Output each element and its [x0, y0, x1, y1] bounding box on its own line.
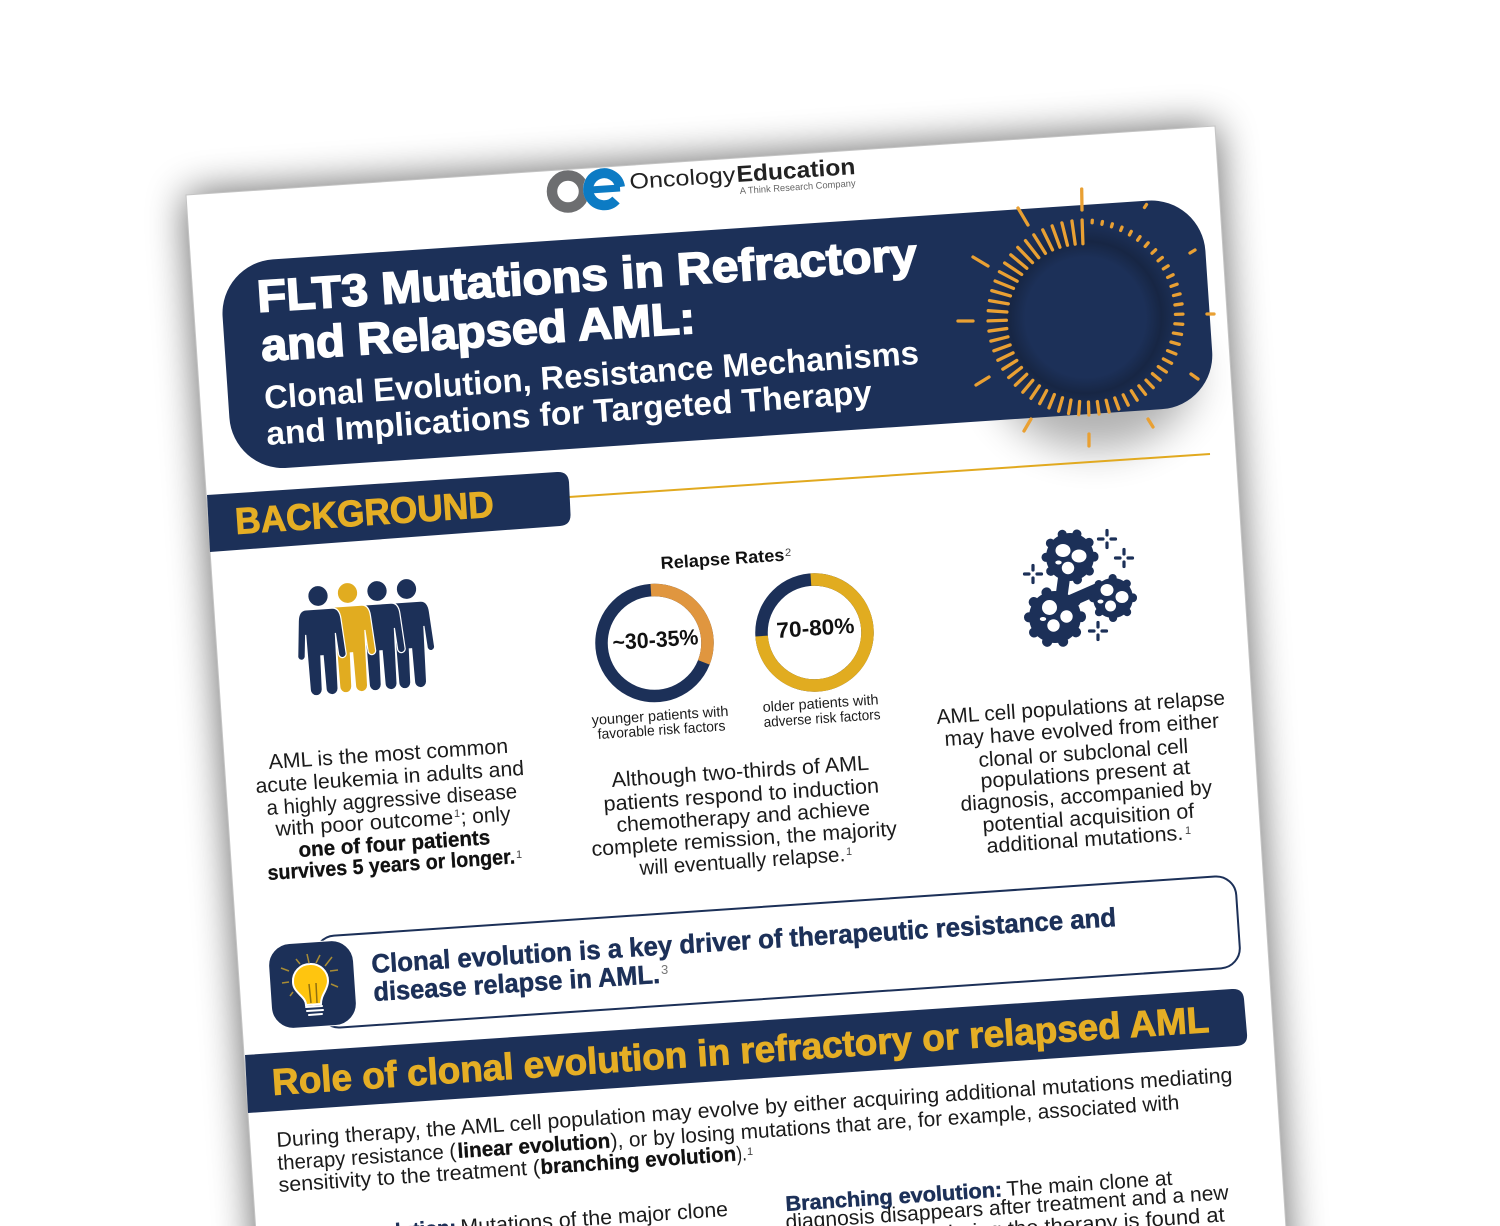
- icon: logo o: [552, 176, 584, 208]
- text: AML intro: one of four patients: [298, 826, 491, 862]
- text: AML intro: 1: [454, 808, 460, 820]
- callout text: 3: [661, 962, 668, 977]
- text: evolution overview: linear evolution: [457, 1130, 611, 1163]
- text: evolution overview: During therapy, the AML cell population may evolve by either acquiring additional mutations mediating: [276, 1064, 1233, 1152]
- caption: older patients: older patients with: [762, 692, 879, 716]
- title: [255, 228, 918, 371]
- text: cell populations: may have evolved from either: [944, 710, 1220, 751]
- text: relapse summary: [591, 752, 898, 880]
- text: AML intro: with poor outcome: [274, 806, 454, 841]
- banner shadow: [995, 300, 1195, 450]
- text: cell populations: 1: [1185, 825, 1191, 837]
- divider line: [569, 454, 1210, 497]
- subtitle: Clonal Evolution, Resistance Mechanisms: [263, 334, 920, 416]
- text: linear evolution: [295, 1198, 729, 1226]
- text: AML intro: AML is the most common: [268, 735, 509, 774]
- logo wordmark: A Think Research Company: [739, 178, 856, 197]
- text: evolution overview: [276, 1064, 1233, 1197]
- callout text: disease relapse in AML.: [372, 959, 661, 1007]
- gear bottom: [1029, 591, 1081, 643]
- text: AML intro: survives 5 years or longer.: [267, 845, 516, 885]
- text: cell populations: potential acquisition of: [982, 800, 1195, 837]
- text: relapse summary: 1: [846, 846, 852, 858]
- text: evolution overview: ).: [736, 1142, 747, 1166]
- text: evolution overview: sensitivity to the treatment (: [278, 1156, 541, 1197]
- text: cell populations: clonal or subclonal cell: [978, 735, 1189, 772]
- person 3: [352, 579, 408, 692]
- icon: people: [293, 577, 437, 697]
- text: AML intro: 1: [516, 849, 522, 861]
- logo wordmark: Education: [736, 153, 856, 187]
- person 2: [323, 581, 378, 694]
- text: branching evolution: Branching evolution:: [785, 1178, 1003, 1216]
- gear right: [1093, 578, 1133, 618]
- text: relapse summary: Although two-thirds of AML: [611, 752, 870, 792]
- gear top: [1046, 533, 1094, 581]
- person 4: [382, 577, 437, 690]
- text: evolution overview: therapy resistance (: [277, 1140, 457, 1175]
- text: evolution overview: 1: [747, 1146, 753, 1158]
- relapse rates heading: 2: [785, 547, 791, 559]
- role of clonal evolution heading: Role of clonal evolution in refractory or relapsed AML: [271, 999, 1210, 1103]
- page sheet: [186, 126, 1290, 1226]
- icon: logo e: [583, 168, 625, 210]
- text: cell populations: AML cell populations at relapse: [936, 687, 1226, 729]
- text: AML intro: acute leukemia in adults and: [255, 757, 525, 798]
- text: AML intro: [255, 735, 525, 885]
- text: branching evolution: The main clone at: [1006, 1167, 1173, 1201]
- relapse rates heading: Relapse Rates: [660, 545, 785, 573]
- dial graphic: [958, 189, 1214, 446]
- text: AML intro: a highly aggressive disease: [266, 780, 518, 820]
- gear connectors: [1061, 578, 1100, 602]
- person 1: [293, 584, 349, 697]
- callout text: Clonal evolution is a key driver of therapeutic resistance and: [370, 902, 1117, 979]
- title: and Relapsed AML:: [259, 292, 697, 371]
- donut chart: older patients: [758, 576, 871, 689]
- text: relapse summary: will eventually relapse.: [638, 843, 846, 880]
- text: evolution overview: ), or by losing mutations that are, for example, associated with: [610, 1091, 1180, 1153]
- page shadow: [186, 126, 1290, 1226]
- text: cell populations: diagnosis, accompanied by: [960, 776, 1213, 816]
- background heading: BACKGROUND: [234, 484, 495, 542]
- donut chart: older patients: 70-80%: [776, 613, 855, 643]
- subtitle: [263, 334, 920, 452]
- caption: older patients: [762, 692, 881, 731]
- subtitle: and Implications for Targeted Therapy: [265, 373, 874, 452]
- text: relapse summary: chemotherapy and achieve: [616, 797, 871, 837]
- donut chart: younger patients: [598, 587, 711, 699]
- text: relapse summary: patients respond to induction: [603, 775, 880, 816]
- caption: younger patients: favorable risk factors: [597, 718, 726, 743]
- text: relapse summary: complete remission, the majority: [591, 817, 898, 861]
- text: evolution overview: branching evolution: [540, 1143, 737, 1179]
- donut chart: younger patients: ~30-35%: [612, 624, 699, 655]
- text: cell populations: [936, 687, 1226, 858]
- sparkles: [1024, 530, 1132, 640]
- title banner: [219, 197, 1216, 472]
- caption: older patients: adverse risk factors: [763, 707, 881, 731]
- caption: younger patients: [591, 704, 729, 743]
- text: AML intro: ; only: [460, 803, 512, 829]
- logo wordmark: Oncology: [629, 162, 736, 194]
- icon: lightbulb: [267, 939, 358, 1030]
- text: cell populations: populations present at: [980, 756, 1191, 793]
- logo: [552, 153, 856, 210]
- logo wordmark: [629, 153, 856, 197]
- title: FLT3 Mutations in Refractory: [255, 228, 918, 322]
- text: cell populations: additional mutations.: [986, 822, 1184, 858]
- background heading: [207, 472, 571, 552]
- icon: gears: [1024, 530, 1133, 643]
- callout: [267, 875, 1241, 1030]
- caption: younger patients: younger patients with: [591, 704, 729, 729]
